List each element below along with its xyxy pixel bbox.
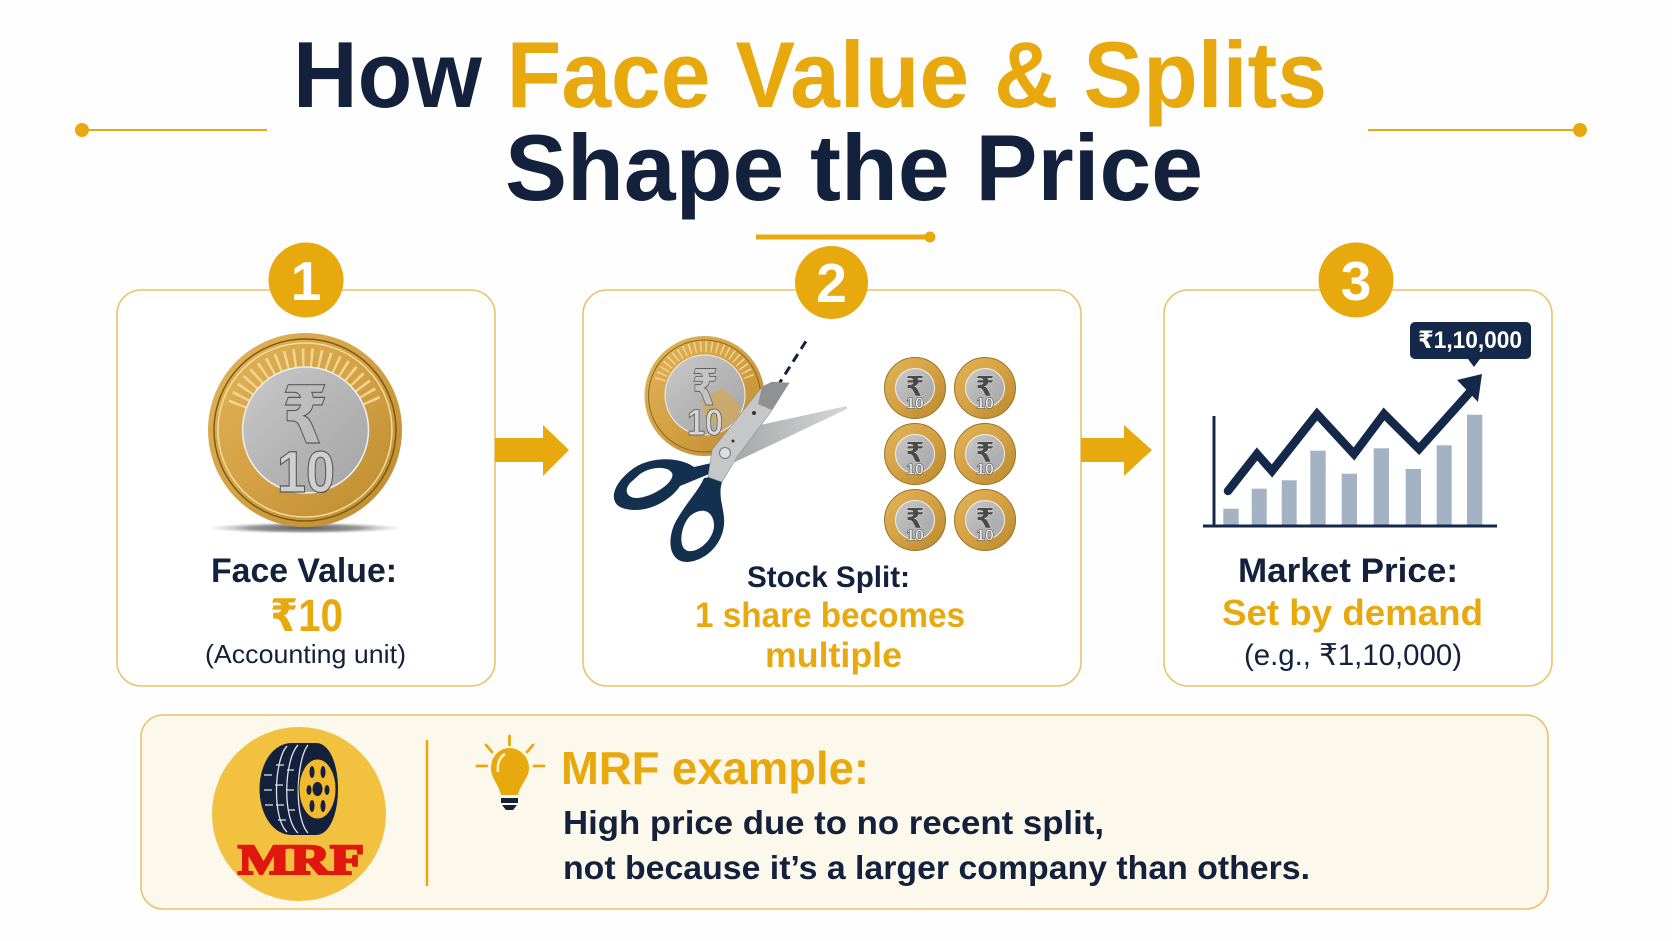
left title ornament [75, 123, 267, 137]
trend line with arrow [1228, 374, 1482, 491]
icon: six small coins: ₹ [905, 371, 925, 402]
icon: cut line [777, 338, 808, 387]
face value label: Face Value: [211, 552, 397, 590]
arrow: face value to split [495, 425, 569, 476]
MRF wordmark: MRF [238, 838, 364, 884]
panel: MRF example [141, 715, 1548, 909]
stock split label: Stock Split: [747, 561, 910, 594]
title: How Face Value & Splits [293, 22, 1327, 127]
MRF example heading: MRF example: [561, 742, 869, 794]
coin shadow [212, 522, 398, 534]
icon: six small coins: 10 [906, 396, 924, 412]
icon: six small coins: ₹ [905, 503, 925, 534]
title: Shape the Price [505, 115, 1203, 220]
icon: light bulb [477, 736, 544, 810]
icon: six small coins: 10 [906, 462, 924, 478]
MRF example body [563, 804, 1310, 886]
icon: six small coins: 10 [976, 396, 994, 412]
market price example: (e.g., ₹1,10,000) [1244, 639, 1462, 672]
arrow: split to market price [1081, 425, 1152, 476]
panel: face value [117, 290, 495, 686]
price tooltip [1410, 322, 1531, 367]
icon: scissors [614, 382, 847, 562]
step badge 3 [1318, 242, 1394, 318]
icon: six small coins: ₹ [975, 503, 995, 534]
step badge 1 [268, 242, 344, 318]
icon: six small coins: 10 [906, 528, 924, 544]
divider [426, 740, 428, 886]
icon: six small coins: ₹ [905, 437, 925, 468]
MRF example body: not because it’s a larger company than others. [563, 849, 1310, 886]
icon: six small coins: ₹ [975, 371, 995, 402]
icon: ten rupee coin: ₹ [282, 371, 328, 460]
set by demand: Set by demand [1222, 592, 1483, 633]
icon: ten rupee coin [208, 333, 402, 527]
icon: six small coins: 10 [976, 528, 994, 544]
icon: tyre [260, 743, 338, 835]
face value amount: ₹10 [270, 590, 343, 641]
price tooltip: ₹1,10,000 [1418, 327, 1522, 354]
MRF example body: High price due to no recent split, [563, 804, 1104, 841]
stock split description: 1 share becomes [695, 596, 965, 635]
panel: market price [1164, 290, 1552, 686]
title [293, 22, 1327, 220]
icon: ten rupee coin: 10 [277, 440, 335, 505]
stock split description [695, 596, 965, 675]
stock split description: multiple [765, 636, 902, 675]
icon: six small coins: ₹ [975, 437, 995, 468]
panel: stock split [583, 290, 1081, 686]
MRF logo [212, 727, 386, 901]
icon: coin being cut: ₹ [692, 360, 718, 416]
step badge 1: 1 [291, 250, 321, 312]
face value note: (Accounting unit) [205, 639, 406, 669]
icon: coin being cut [644, 336, 764, 456]
step badge 2: 2 [816, 252, 847, 314]
title underline [756, 232, 936, 242]
step badge 2 [795, 246, 868, 319]
icon: six small coins: 10 [976, 462, 994, 478]
step badge 3: 3 [1341, 250, 1371, 312]
right title ornament [1368, 123, 1587, 137]
market price label: Market Price: [1238, 552, 1458, 590]
bar chart [1203, 374, 1497, 526]
icon: coin being cut: 10 [687, 402, 723, 443]
icon: six small coins [884, 358, 1016, 550]
